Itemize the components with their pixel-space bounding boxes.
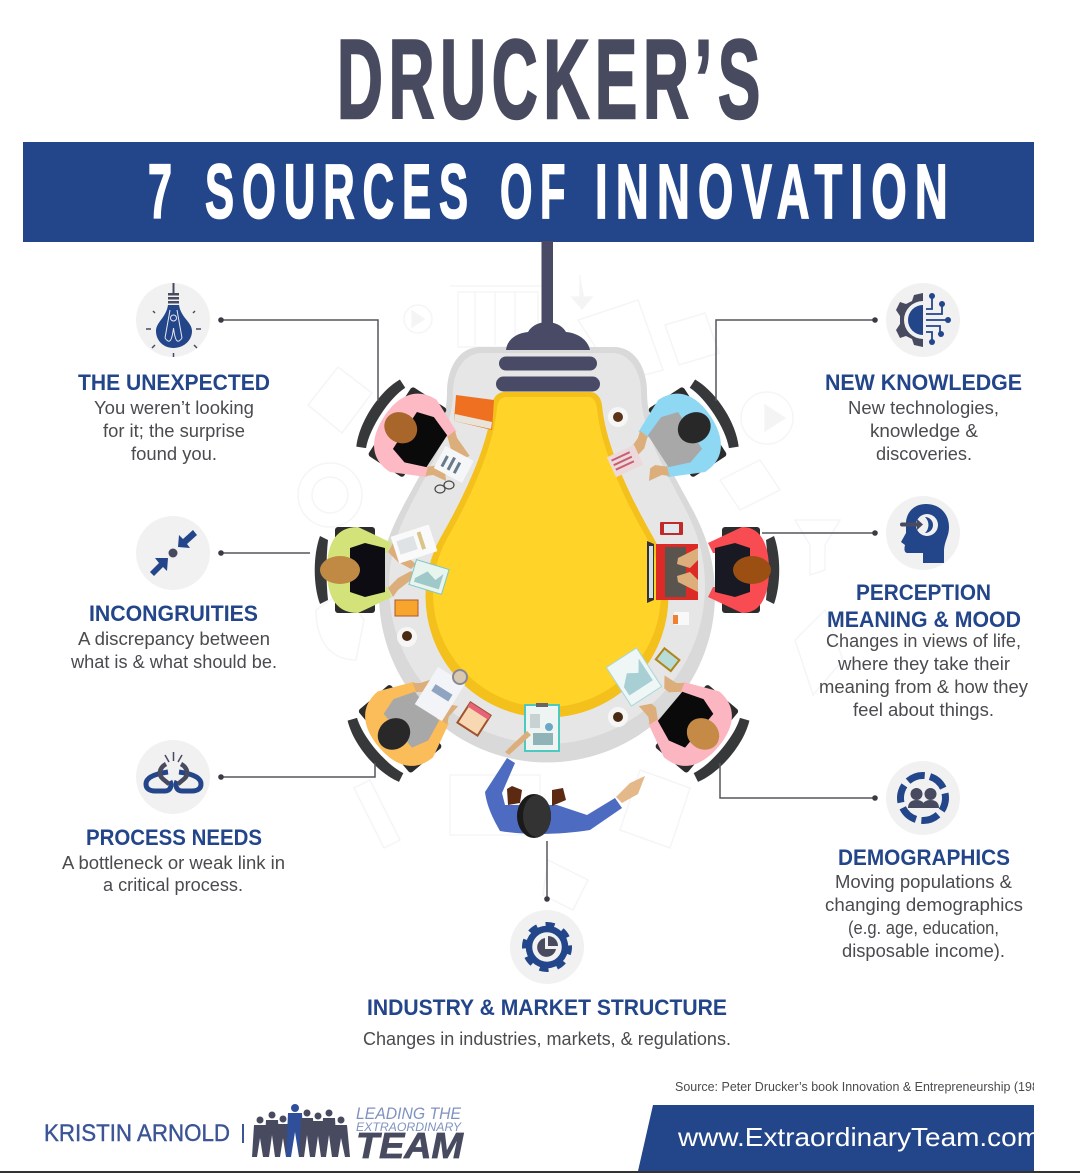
logo: Kristin Arnold Leading the Extraordinary Team <box>44 1104 464 1166</box>
icon: head with arrow <box>886 496 960 570</box>
item: tablet right <box>656 648 679 671</box>
bulb base and cord <box>496 241 600 392</box>
icon: inward arrows <box>136 516 210 590</box>
item: documents left <box>391 525 449 616</box>
item: note <box>673 612 689 625</box>
logo: Kristin Arnold Leading the Extraordinary Team: KRISTIN ARNOLD <box>44 1120 230 1147</box>
icon: lightbulb <box>136 283 210 357</box>
lightbulb table <box>379 347 715 762</box>
person: presenter standing <box>485 731 645 838</box>
icon: demographics <box>886 761 960 835</box>
faint background icons <box>298 275 843 910</box>
item: report upper right <box>607 445 643 477</box>
item: coffee cup left <box>397 627 417 647</box>
footer band with website: www.ExtraordinaryTeam.com <box>677 1122 1040 1152</box>
text: demographics <box>825 845 1023 961</box>
text: process needs <box>62 825 285 895</box>
text: process needs: A bottleneck or weak link in <box>62 853 285 873</box>
person: pink top left <box>348 372 485 504</box>
item: report lower left <box>415 667 467 721</box>
text: incongruities: what is & what should be. <box>70 652 277 672</box>
item: report upper left <box>434 446 474 483</box>
text: perception meaning and mood: where they take their <box>837 654 1010 674</box>
text: process needs: PROCESS NEEDS <box>86 825 262 850</box>
bottom rule <box>0 1171 1080 1173</box>
item: chart right <box>606 648 662 706</box>
item: coffee cup top <box>608 407 628 427</box>
text: perception meaning and mood: Changes in views of life, <box>826 631 1021 651</box>
item: calendar <box>457 702 491 736</box>
text: process needs: a critical process. <box>103 875 243 895</box>
connector lines <box>221 320 875 899</box>
item: coffee cup bottom <box>608 707 628 727</box>
text: perception meaning and mood <box>819 580 1028 720</box>
title: DRUCKER’S <box>337 17 766 142</box>
text: industry and market structure <box>363 995 731 1049</box>
text: new knowledge: knowledge & <box>870 421 978 441</box>
text: the unexpected: for it; the surprise <box>103 421 245 441</box>
banner: subtitle: OF <box>500 149 573 235</box>
text: the unexpected: You weren’t looking <box>94 398 254 418</box>
text: demographics: disposable income). <box>842 941 1005 961</box>
person: orange lower left <box>339 654 478 790</box>
text: demographics: Moving populations & <box>835 872 1012 892</box>
item: laptop <box>647 541 698 603</box>
text: demographics: DEMOGRAPHICS <box>838 845 1010 870</box>
connector dots <box>218 317 878 902</box>
banner: subtitle <box>23 142 1034 242</box>
text: perception meaning and mood: MEANING & MOOD <box>827 607 1021 632</box>
text: new knowledge: discoveries. <box>876 444 972 464</box>
text: industry and market structure: INDUSTRY & MARKET STRUCTURE <box>367 995 727 1020</box>
text: perception meaning and mood: PERCEPTION <box>856 580 991 605</box>
person: pink lower right <box>624 658 758 790</box>
banner: subtitle: SOURCES <box>205 149 476 235</box>
logo: Kristin Arnold Leading the Extraordinary Team: EXTRAORDINARY <box>356 1120 462 1134</box>
text: demographics: changing demographics <box>825 895 1023 915</box>
table items <box>391 395 698 751</box>
text: the unexpected: THE UNEXPECTED <box>78 370 270 395</box>
item: clipboard <box>525 703 559 751</box>
icon: broken chain <box>136 740 210 814</box>
text: incongruities <box>70 601 277 672</box>
person: red right <box>708 527 779 613</box>
person: green left <box>315 527 416 613</box>
icon: gear and circuit <box>886 283 960 357</box>
source note: Source: Peter Drucker’s book Innovation & Entrepreneurship (1985) <box>675 1080 1050 1094</box>
logo: Kristin Arnold Leading the Extraordinary Team: TEAM <box>356 1125 464 1166</box>
text: new knowledge <box>825 370 1022 464</box>
logo: Kristin Arnold Leading the Extraordinary Team: LEADING THE <box>356 1104 462 1123</box>
text: the unexpected: found you. <box>131 444 217 464</box>
item: piano <box>454 395 494 430</box>
banner: subtitle: 7 <box>148 149 172 235</box>
person: blue top right <box>610 372 747 504</box>
text: demographics: (e.g. age, education, <box>848 918 999 938</box>
text: new knowledge: NEW KNOWLEDGE <box>825 370 1022 395</box>
logo: team silhouettes <box>252 1104 350 1157</box>
text: perception meaning and mood: meaning from & how they <box>819 677 1028 697</box>
footer band with website <box>638 1105 1040 1171</box>
item: phone <box>660 522 683 535</box>
icon: gear with pie chart <box>510 910 584 984</box>
text: perception meaning and mood: feel about things. <box>853 700 994 720</box>
text: industry and market structure: Changes in industries, markets, & regulations. <box>363 1029 731 1049</box>
item: glasses <box>435 481 454 493</box>
text: the unexpected <box>78 370 270 464</box>
text: incongruities: INCONGRUITIES <box>89 601 258 626</box>
text: incongruities: A discrepancy between <box>78 629 270 649</box>
text: new knowledge: New technologies, <box>848 398 999 418</box>
